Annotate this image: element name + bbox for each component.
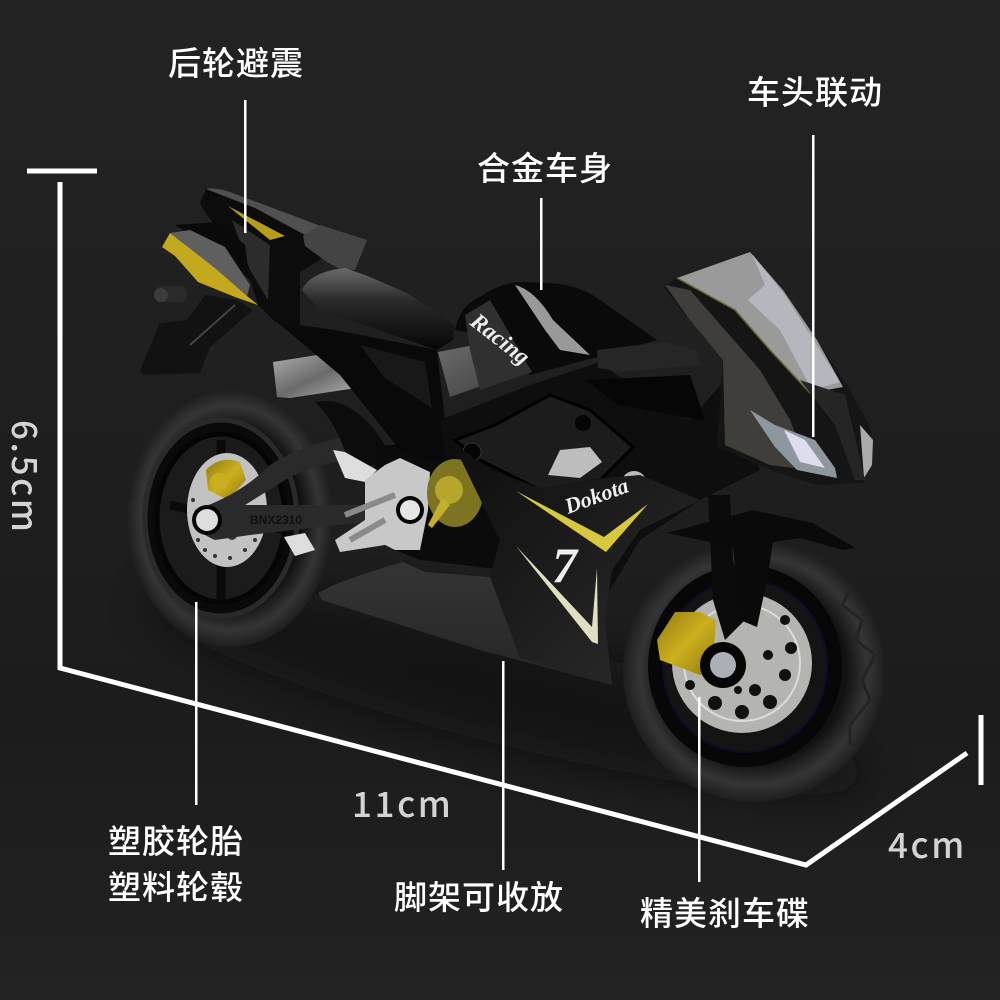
callout: tyres and hubs: 塑胶轮胎 bbox=[108, 823, 244, 860]
callout: alloy body bbox=[477, 150, 613, 290]
belly pan bbox=[318, 562, 612, 685]
rear fender bbox=[315, 401, 395, 470]
rear light yellow fender bbox=[162, 222, 258, 305]
lower side fairing bbox=[453, 443, 700, 685]
seat bbox=[302, 268, 455, 350]
side panel bbox=[438, 340, 532, 397]
callout: tyres and hubs bbox=[108, 602, 244, 906]
floor shadow bbox=[138, 547, 882, 833]
frame bbox=[277, 322, 505, 462]
side vent with silver engine part bbox=[455, 395, 646, 493]
swingarm bbox=[192, 437, 365, 556]
dimension lines bbox=[27, 171, 981, 865]
lower side fairing: Dokota bbox=[560, 473, 632, 519]
callout: brake disc: 精美刹车碟 bbox=[640, 895, 810, 932]
handlebar bbox=[585, 342, 705, 420]
callout: tyres and hubs: 塑料轮毂 bbox=[108, 869, 244, 906]
rear wheel bbox=[127, 389, 333, 647]
rear seat hump bbox=[303, 225, 367, 270]
front fork and fender bbox=[657, 495, 855, 688]
callout: alloy body: 合金车身 bbox=[477, 150, 613, 187]
fuel tank bbox=[455, 282, 657, 390]
number plate bbox=[140, 286, 253, 375]
engine and silver parts bbox=[333, 445, 505, 570]
swingarm: BNX2310 bbox=[250, 513, 302, 527]
silver footpeg bracket bbox=[273, 355, 363, 398]
callout: kickstand: 脚架可收放 bbox=[394, 879, 564, 916]
headlight bbox=[750, 410, 837, 478]
tail cowl bbox=[200, 188, 333, 330]
lower side fairing: 7 bbox=[552, 537, 579, 593]
depth label: 4cm bbox=[888, 818, 967, 869]
height label: 6.5cm bbox=[1, 420, 52, 534]
yellow engine knob bbox=[427, 459, 483, 528]
length label: 11cm bbox=[352, 777, 453, 828]
motorcycle model bbox=[127, 188, 885, 802]
upper fairing body bbox=[440, 362, 760, 655]
head fairing bbox=[663, 252, 873, 485]
front wheel bbox=[623, 540, 885, 802]
racing logo: Racing bbox=[465, 308, 535, 370]
yellow rear spring bbox=[375, 390, 398, 438]
fairing decals bbox=[516, 491, 648, 552]
callout: rear shock: 后轮避震 bbox=[168, 45, 304, 82]
callout: linked front: 车头联动 bbox=[747, 74, 883, 111]
frame window bbox=[360, 345, 432, 408]
